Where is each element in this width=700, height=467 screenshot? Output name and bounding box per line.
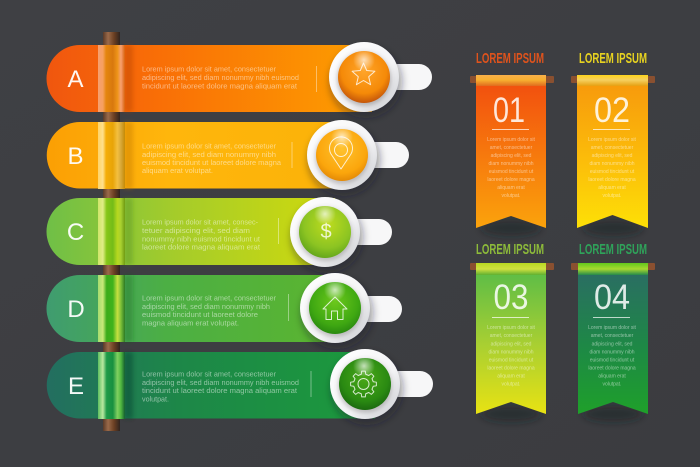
ribbon 03 text: amet, consectetuer	[490, 333, 533, 339]
wrap band C	[98, 198, 125, 265]
tab E	[386, 371, 433, 397]
panel: row E	[47, 349, 433, 425]
text C: laoreet dolore magna aliquam erat	[142, 244, 260, 252]
ribbon 04 roller	[571, 263, 655, 275]
panel: ribbon 02	[571, 50, 655, 236]
ribbon 02 text: diam nonummy nibh	[589, 161, 635, 167]
ribbon 03 text: Lorem ipsum dolor sit	[487, 325, 536, 331]
ribbon 02 shadow	[583, 220, 643, 236]
text D: magna aliquam erat volutpat.	[142, 320, 239, 328]
wrap band B	[98, 122, 125, 189]
text D	[142, 296, 277, 328]
ribbon 03 text: adipiscing elit, sed	[491, 342, 532, 348]
ribbon 02 text: aliquam erat	[598, 185, 626, 191]
ribbon 03 body	[476, 274, 546, 414]
tab D	[355, 296, 402, 322]
text D: adipiscing elit, sed diam nonummy nibh	[142, 304, 270, 311]
ribbon 03 text: laoreet dolore magna	[487, 366, 535, 372]
text A: adipiscing elit, sed diam nonummy nibh euismod	[142, 75, 299, 82]
ribbon 01 text: amet, consectetuer	[490, 145, 533, 151]
ribbon 02 text: volutpat.	[603, 193, 621, 199]
ribbon 01 text: volutpat.	[502, 193, 520, 199]
button E	[330, 349, 403, 425]
icon: star	[352, 63, 375, 85]
ribbon 04 text: Lorem ipsum dolor sit	[588, 325, 637, 331]
ribbon 04 text: diam nonummy nibh	[589, 350, 635, 356]
text A	[142, 66, 299, 90]
panel: row D	[46, 273, 402, 349]
ribbon 01 text: aliquam erat	[497, 185, 525, 191]
ribbon 04 text: amet, consectetuer	[591, 333, 634, 339]
tab B	[362, 142, 409, 168]
ribbon 01 heading: LOREM IPSUM	[476, 50, 544, 67]
ribbon 01 shadow	[481, 220, 541, 236]
text B: aliquam erat volutpat.	[142, 168, 213, 175]
ribbon 04 body	[578, 274, 648, 414]
icon: dollar: $	[320, 221, 332, 243]
text C: tetuer adipiscing elit, sed diam	[142, 228, 250, 235]
button D	[300, 273, 373, 349]
wrap band D	[98, 275, 125, 342]
ribbon 04 number: 04	[594, 278, 630, 317]
bar B	[47, 122, 350, 188]
panel: ribbon 01	[470, 50, 554, 236]
ribbon 03 text	[487, 325, 536, 388]
ribbon 01 text: adipiscing elit, sed	[491, 153, 532, 159]
ribbon 02 text: amet, consectetuer	[591, 145, 634, 151]
ribbon 02 text: laoreet dolore magna	[588, 177, 636, 183]
text A: Lorem ipsum dolor sit amet, consectetuer	[142, 66, 277, 74]
button B	[307, 120, 380, 196]
button A	[329, 42, 402, 118]
text D: Lorem ipsum dolor sit amet, consectetuer	[142, 296, 277, 302]
ribbon 02 text: Lorem ipsum dolor sit	[588, 137, 637, 143]
bar E	[47, 352, 375, 418]
ribbon 02 text	[588, 137, 637, 199]
fold shadow B	[124, 122, 133, 189]
ribbon 01 body	[476, 84, 546, 228]
fold shadow E	[124, 352, 133, 419]
text B	[142, 144, 281, 175]
text E: Lorem ipsum dolor sit amet, consectetuer	[142, 372, 277, 378]
ribbon 04 heading: LOREM IPSUM	[579, 241, 647, 258]
text D: euismod tincidunt ut laoreet dolore	[142, 312, 258, 319]
bar D	[46, 275, 345, 342]
panel: row B	[47, 120, 409, 196]
ribbon 01 roller	[470, 75, 554, 86]
ribbon 02 roller	[571, 75, 655, 86]
text E: adipiscing elit, sed diam nonummy nibh euismod	[142, 380, 299, 387]
ribbon 04 text: aliquam erat	[598, 374, 626, 380]
tab A	[385, 64, 432, 90]
text E	[142, 372, 299, 404]
ribbon 02 number: 02	[594, 91, 630, 130]
letter E: E	[68, 373, 84, 400]
ribbon 01 number: 01	[493, 91, 525, 130]
ribbon 01 text	[487, 137, 536, 199]
ribbon 03 text: euismod tincidunt ut	[489, 358, 534, 364]
ribbon 01 text: euismod tincidunt ut	[489, 169, 534, 175]
tab C	[345, 219, 392, 245]
ribbon 03 text: diam nonummy nibh	[488, 350, 534, 356]
letter C: C	[67, 219, 84, 246]
ribbon 02 heading: LOREM IPSUM	[579, 50, 647, 67]
wrap band E	[98, 352, 125, 419]
text B: Lorem ipsum dolor sit amet, consectetuer	[142, 144, 277, 150]
panel: ribbon 03	[470, 241, 554, 422]
button C	[290, 197, 363, 273]
ribbon 04 text: laoreet dolore magna	[588, 366, 636, 372]
letter D: D	[67, 296, 85, 323]
ribbon 03 number: 03	[494, 278, 528, 317]
panel: row C	[46, 197, 392, 273]
letter A: A	[67, 66, 84, 93]
ribbon 04 text: euismod tincidunt ut	[590, 358, 635, 364]
ribbon 02 text: euismod tincidunt ut	[590, 169, 635, 175]
ribbon 04 text: volutpat.	[603, 382, 621, 388]
ribbon 01 text: Lorem ipsum dolor sit	[487, 137, 536, 143]
ribbon 03 text: aliquam erat	[497, 374, 525, 380]
ribbon 03 shadow	[481, 406, 541, 422]
icon: house	[323, 297, 347, 320]
fold shadow C	[124, 198, 133, 265]
panel: row A	[47, 42, 432, 118]
ribbon 03 text: volutpat.	[502, 382, 520, 388]
ribbon 02 body	[577, 84, 648, 228]
ribbon 03 heading: LOREM IPSUM	[476, 241, 544, 258]
wooden rod	[103, 32, 120, 431]
fold shadow A	[124, 45, 133, 112]
letter B: B	[67, 143, 84, 170]
text C: nonummy nibh euismod tincidunt ut	[142, 236, 260, 244]
icon: location pin	[330, 137, 353, 169]
bar A	[47, 45, 372, 112]
text C	[142, 220, 260, 252]
icon: gear	[351, 371, 376, 397]
fold shadow D	[124, 275, 133, 342]
text B: adipiscing elit, sed diam nonummy nibh	[142, 152, 276, 159]
text E: volutpat.	[142, 396, 169, 404]
panel: ribbon 04	[571, 241, 655, 422]
wrap band A	[98, 45, 125, 112]
text B: euismod tincidunt ut laoreet dolore magna	[142, 160, 281, 167]
ribbon 03 roller	[470, 263, 554, 275]
text C: Lorem ipsum dolor sit amet, consec-	[142, 220, 259, 226]
ribbon 04 shadow	[583, 406, 643, 422]
ribbon 04 text: adipiscing elit, sed	[592, 342, 633, 348]
text E: tincidunt ut laoreet dolore magna aliquam erat	[142, 388, 297, 395]
ribbon 04 text	[588, 325, 637, 388]
text A: tincidunt ut laoreet dolore magna aliquam erat	[142, 84, 297, 90]
ribbon 02 text: adipiscing elit, sed	[592, 153, 633, 159]
ribbon 01 text: laoreet dolore magna	[487, 177, 535, 183]
ribbon 01 text: diam nonummy nibh	[488, 161, 534, 167]
bar C	[46, 198, 335, 265]
